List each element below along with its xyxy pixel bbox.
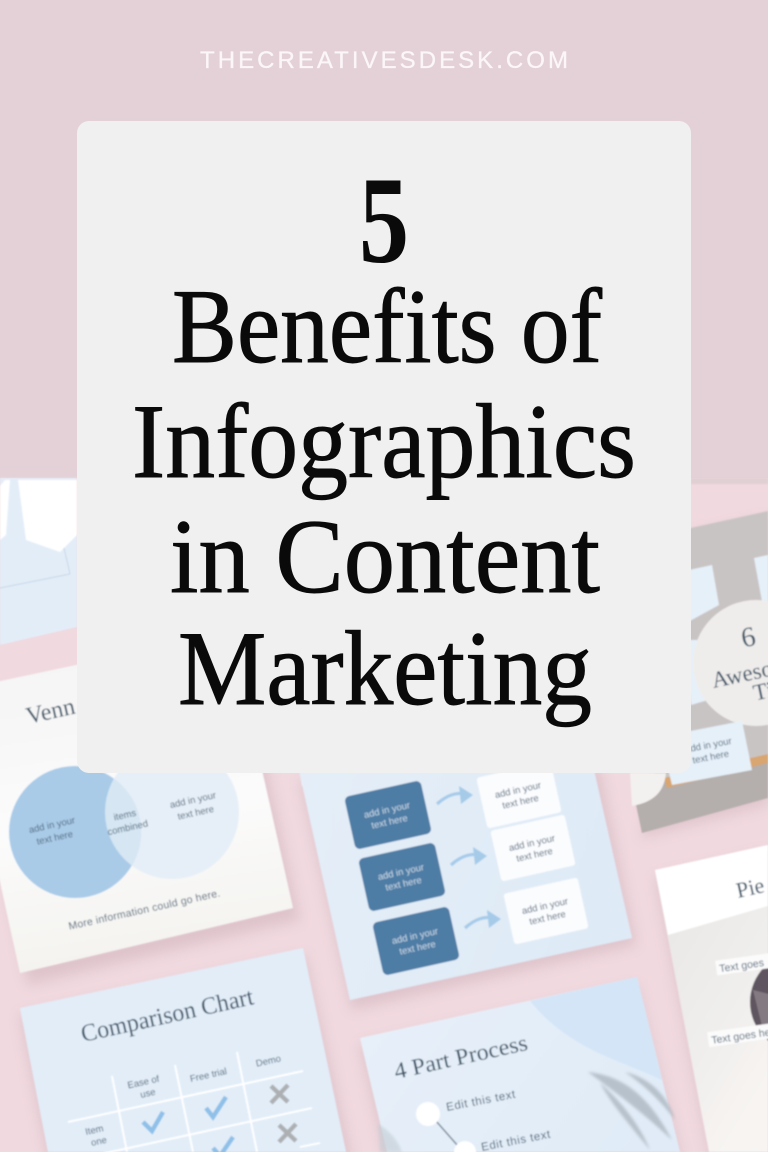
tip box bottom text: add in your [684,736,733,756]
venn circle: right [105,745,239,879]
tips title [709,650,768,713]
column header: ease of use: Ease of [127,1074,161,1091]
pie header band [655,845,768,935]
feather decoration right [588,1072,675,1150]
central circle [693,600,768,726]
title line 3: in Content [170,498,600,615]
pie label 1: Text goes [719,957,765,975]
feather decoration left [378,1124,402,1152]
row header: item one: one [90,1135,108,1149]
answer box 2: add in your [508,833,556,854]
slide shadow: pie [655,852,768,1152]
tip box mid-left [685,640,708,705]
slide: flow boxes [290,730,632,1000]
slide: venn diagram [0,632,293,973]
venn label: overlap: items [113,808,138,823]
flow box 1: text here [370,813,409,832]
slide: upper sliver above flow card [300,773,360,786]
process connector [436,1121,458,1146]
answer box 3: add in your [521,896,569,917]
answer box 3: text here [528,909,567,928]
slide: 6 awesome tips photo [600,478,768,833]
venn label: left: text here [36,829,74,848]
top grey strip [691,478,768,484]
slide shadow: tips [642,518,768,838]
background: pink collage area [0,478,768,1152]
column header: ease of use [127,1074,163,1103]
site url: THECREATIVESDESK.COM [200,47,568,74]
title line 2: Infographics [132,383,636,500]
collage of tilted slide previews [0,478,768,1152]
venn label: left: add in your [28,815,76,836]
column header: free trial: Free trial [189,1066,228,1085]
pie label 1 [715,951,768,976]
venn label: overlap [104,806,149,838]
cross marks [271,1085,296,1142]
venn label: right [169,790,220,824]
row header: item one: Item [84,1123,105,1138]
slide: comparison chart [20,948,346,1152]
white cup [630,773,666,806]
answer box 3 [503,877,589,945]
flow box 2: add in your [377,862,425,883]
row header: item one [84,1123,108,1150]
title number: 5 [359,152,409,289]
chart title: Comparison Chart [78,983,256,1048]
slide: pie chart [655,845,768,1152]
process step text 1: Edit this text [445,1089,517,1114]
flow box 1: add in your [363,800,411,821]
arrow 3 [465,910,501,928]
flow box 3: text here [398,939,437,958]
title line 4: Marketing [178,610,592,727]
tip box bottom text: text here [692,749,730,766]
arrow 1 [437,786,473,804]
venn label: right: add in your [169,790,217,811]
flow box 1 [344,780,432,850]
process title: 4 Part Process [392,1030,530,1084]
venn footnote: More information could go here. [67,887,221,933]
venn circle: left [9,766,141,898]
chart grid [60,1052,320,1152]
tip box bottom [660,721,752,785]
flow box 2 [358,842,446,912]
title block [132,152,636,727]
pie chart circle [750,952,768,1052]
column header: ease of use: use [139,1087,157,1101]
arrow 2 [451,847,487,865]
pie title: Pie [734,872,767,903]
tips number: 6 [739,621,758,654]
column header: demo: Demo [255,1053,282,1070]
venn label: left [28,815,79,849]
title line 1: Benefits of [172,268,603,385]
check marks [143,1097,233,1152]
tip box right [754,555,768,612]
slide shadow: comparison [20,955,352,1152]
tip box left [680,565,719,622]
title panel [77,121,691,773]
flow box 3: add in your [391,926,439,947]
process node 2 [454,1141,476,1152]
venn label: right: text here [177,804,215,823]
answer box 1 [476,761,562,829]
tip box bottom text [684,736,735,767]
answer box 1: text here [501,793,540,812]
slide shadow: process [360,985,682,1152]
slide: top-left process card [0,478,77,645]
answer box 2: text here [515,846,554,865]
concrete surface [632,756,768,833]
venn label: overlap: combined [107,818,149,838]
slide shadow: flow [300,770,636,1010]
answer box 2 [490,814,576,882]
slide: 4 part process [360,977,680,1152]
slide title: Venn: Venn [24,694,77,730]
answer box 1: add in your [494,780,542,801]
process node 1 [416,1102,440,1126]
background: mauve header band [0,0,768,480]
flow box 3 [372,906,460,976]
slide shadow: venn [0,650,300,985]
orange shelf edge [664,754,768,788]
flow box 2: text here [384,875,423,894]
photo backdrop [600,511,768,790]
venn overlap lens [104,779,142,866]
